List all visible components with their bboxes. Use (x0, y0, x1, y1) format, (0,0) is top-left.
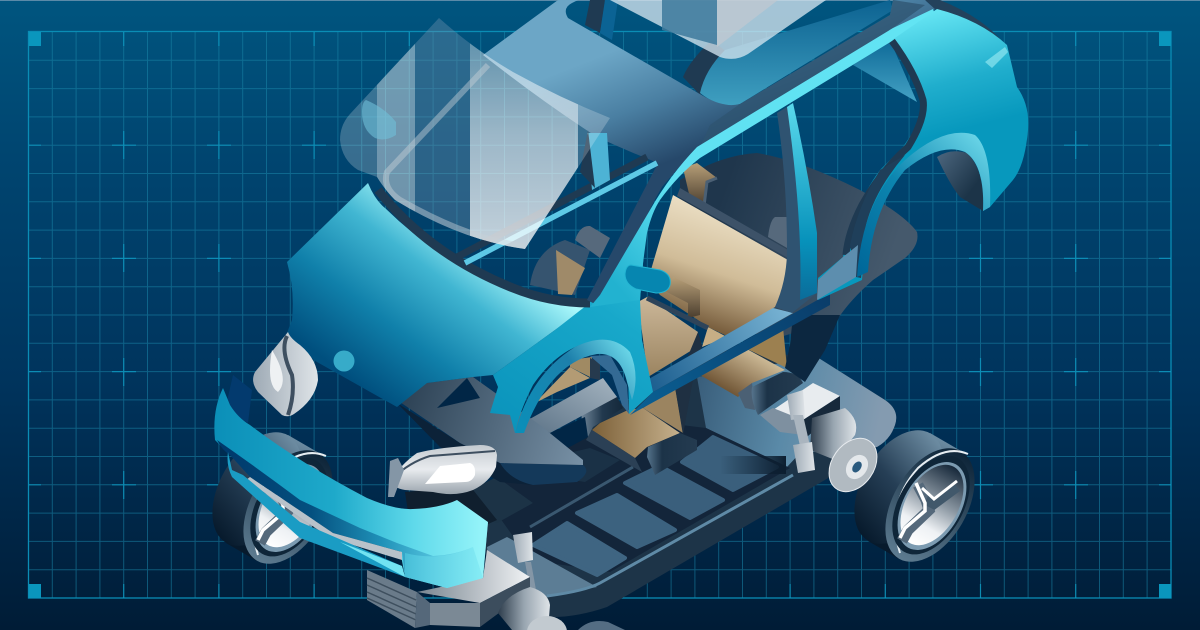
rear door jamb (846, 41, 923, 255)
rear wheel arch (857, 133, 990, 277)
chassis platform (470, 350, 896, 617)
bumper end (405, 522, 488, 588)
radiator unit (367, 550, 530, 628)
lower backrest (745, 327, 787, 368)
front bumper (214, 375, 488, 588)
quarter panel highlight (985, 47, 1008, 68)
frame bar (647, 298, 708, 328)
battery cell 1 (682, 437, 777, 490)
headrest: rear left (683, 163, 717, 206)
radiator front (430, 603, 480, 627)
front strut (388, 458, 536, 590)
seat: rear row lower (700, 327, 803, 415)
corner marker: bottom left (29, 584, 41, 598)
bumper opening (246, 477, 402, 560)
front fender (490, 215, 653, 433)
headrest (663, 277, 700, 318)
bolster (582, 397, 623, 437)
corner marker: top left (29, 32, 41, 46)
B pillar (775, 105, 817, 313)
rear interior window panel (853, 40, 917, 102)
top face (397, 377, 583, 465)
seat behind front wheel arch (535, 357, 600, 403)
corner marker: top right (1159, 32, 1171, 46)
shadow on battery (720, 456, 786, 474)
rear roof end (925, 0, 1007, 47)
suspension strut (787, 390, 815, 473)
seat pad (752, 372, 803, 415)
rear floor panel (680, 153, 918, 340)
backrest upper (638, 297, 698, 377)
roof shadow band (700, 0, 925, 147)
seat rail: rear (677, 188, 788, 258)
seat: rear row backrest (648, 195, 788, 336)
bolster (738, 383, 755, 410)
shadow side (397, 403, 533, 485)
glass frame line (386, 65, 525, 246)
sill side face (630, 293, 830, 415)
rear axle assembly (760, 383, 887, 501)
hood (285, 183, 587, 407)
lower surface (487, 537, 597, 597)
dark housing under right headlight (405, 486, 497, 532)
inner wheel well (937, 151, 983, 211)
side mirror (625, 265, 670, 293)
seat visible through windscreen (530, 226, 610, 295)
sunroof recess and rear pillars (585, 0, 893, 106)
inner arch (590, 355, 629, 414)
windscreen frame (378, 190, 590, 303)
wheel: rear (836, 415, 993, 577)
interior struts (457, 157, 647, 257)
under-hood panel (397, 377, 586, 485)
windscreen glass (340, 18, 610, 249)
radiator top (417, 550, 530, 603)
backrest lower (643, 387, 683, 433)
bumper lip strip (228, 452, 405, 577)
rear quarter panel (818, 9, 1028, 300)
headlight: left (253, 332, 318, 416)
brake disc (819, 429, 887, 501)
corner marker: bottom right (1159, 584, 1171, 598)
cushion (592, 408, 680, 458)
seat: front row (582, 277, 708, 475)
bumper lower band (217, 440, 483, 588)
steering column bar (528, 378, 617, 433)
sunroof glass (610, 0, 826, 59)
seat side dark strip (675, 332, 702, 435)
tray rail (530, 467, 633, 527)
door panel foot (817, 245, 858, 300)
headrest: rear right (768, 217, 787, 248)
cyan roof rail (590, 9, 937, 307)
blue side (500, 463, 586, 485)
rear plate (697, 357, 896, 467)
rear navy door block (785, 315, 840, 382)
cushion (700, 348, 785, 397)
dark floor gap (550, 417, 588, 455)
front wheel arch (515, 340, 636, 433)
door sill (630, 293, 830, 415)
battery cell 4 (533, 523, 625, 575)
axle cylinder (810, 408, 856, 460)
bumper upper band (214, 388, 488, 588)
roof (483, 0, 935, 305)
seat pad (647, 433, 697, 475)
axle block (773, 383, 840, 420)
bumper wing (225, 375, 252, 423)
battery cell 3 (577, 495, 675, 547)
battery tray (480, 420, 790, 572)
chassis base (480, 350, 896, 617)
chassis rim highlight (547, 475, 793, 596)
dark opening (437, 378, 480, 408)
car body shell (285, 0, 1028, 433)
battery cell 2 (625, 466, 723, 518)
radiator grille (367, 570, 417, 628)
dark battery cell upper (560, 448, 620, 482)
front axle and disc (498, 587, 625, 630)
hood emblem (334, 350, 354, 372)
dark battery cell left (470, 477, 533, 523)
wheel: front (194, 417, 351, 579)
sill top face (647, 308, 793, 392)
rail (586, 430, 642, 472)
left mirror seen through glass (362, 100, 396, 139)
headlight: right (392, 445, 497, 494)
